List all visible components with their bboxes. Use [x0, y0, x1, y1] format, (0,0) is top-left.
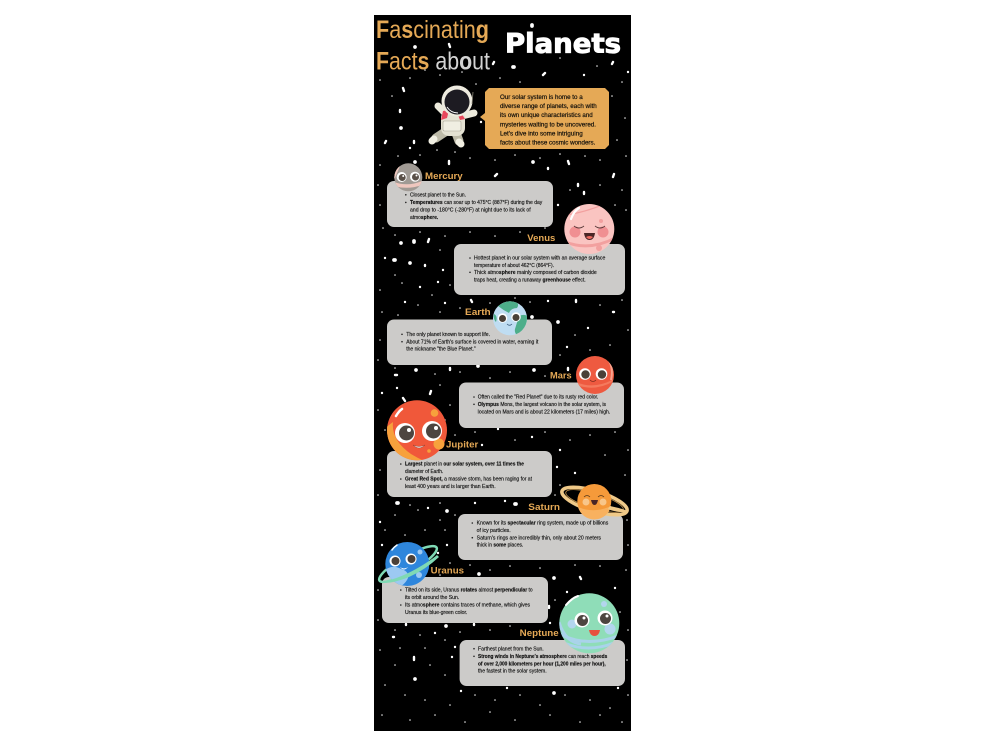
callout: introduction: its own unique characteristics and [500, 113, 593, 119]
Neptune facts: the fastest in the solar system. [478, 669, 547, 675]
panel: Jupiter [385, 400, 552, 497]
panel: Uranus [375, 541, 548, 623]
Uranus facts [400, 588, 533, 616]
Jupiter facts: Largest planet in our solar system, over 11 times the [405, 462, 524, 468]
Venus facts [469, 256, 606, 284]
Jupiter text box [387, 451, 552, 497]
Saturn heading: Saturn [528, 502, 560, 513]
Earth facts: the nickname "the Blue Planet." [406, 347, 476, 353]
callout: introduction: facts about these cosmic wonders. [500, 140, 596, 146]
Jupiter facts: Great Red Spot, a massive storm, has been raging for at [405, 477, 533, 483]
panel: Venus [454, 200, 625, 295]
Neptune facts: Farthest planet from the Sun. [478, 646, 544, 652]
Earth facts: About 71% of Earth's surface is covered in water, earning it [406, 339, 539, 345]
Uranus facts: its orbit around the Sun. [405, 595, 459, 601]
panel: Earth [387, 301, 552, 365]
panel: Mercury [387, 163, 553, 227]
Mars heading: Mars [550, 370, 572, 381]
Uranus heading: Uranus [431, 566, 464, 577]
panel: Mars [459, 356, 624, 428]
Jupiter facts [400, 462, 533, 490]
Earth facts: The only planet known to support life. [406, 332, 490, 338]
Uranus facts: Its atmosphere contains traces of methane, which gives [405, 603, 531, 609]
Earth heading: Earth [465, 307, 491, 318]
Neptune heading: Neptune [520, 628, 559, 639]
callout: introduction: Our solar system is home to a [500, 95, 583, 101]
Jupiter facts: diameter of Earth. [405, 469, 443, 475]
heading line: Facts about: Facts about [376, 48, 490, 76]
heading line: Fascinating: Fascinating [376, 16, 489, 44]
panel: Neptune [460, 593, 625, 686]
Venus facts: temperature of about 462°C (864°F). [474, 263, 554, 269]
Venus facts: traps heat, creating a runaway greenhouse effect. [474, 278, 586, 284]
Neptune text box [460, 640, 625, 686]
Mercury text box [387, 181, 553, 227]
Mars facts: Often called the "Red Planet" due to its rusty red color. [478, 395, 598, 401]
Venus heading: Venus [527, 233, 555, 244]
Neptune facts [473, 646, 608, 675]
Venus facts: Thick atmosphere mainly composed of carbon dioxide [474, 270, 597, 276]
Jupiter heading: Jupiter [446, 439, 479, 450]
Mars facts: Olympus Mons, the largest volcano in the solar system, is [478, 402, 606, 408]
Earth text box [387, 320, 552, 365]
Mars facts: located on Mars and is about 22 kilometers (17 miles) high. [478, 409, 610, 415]
background panel [374, 15, 631, 731]
Saturn facts: Saturn's rings are incredibly thin, only about 20 meters [477, 535, 602, 541]
icon: Mercury planet [394, 163, 422, 191]
Mercury facts: Closest planet to the Sun. [410, 192, 466, 198]
callout: introduction: Let's dive into some intriguing [500, 131, 583, 137]
icon: Jupiter planet [385, 400, 447, 465]
icon: Neptune planet [559, 593, 619, 653]
Uranus facts: Tilted on its side, Uranus rotates almost perpendicular to [405, 588, 533, 594]
panel: Saturn [458, 481, 630, 560]
callout: introduction: mysteries waiting to be uncovered. [500, 122, 596, 128]
Jupiter facts: least 400 years and is larger than Earth. [405, 484, 496, 490]
Neptune facts: Strong winds in Neptune's atmosphere can reach speeds [478, 654, 608, 660]
Uranus facts: Uranus its blue-green color. [405, 610, 467, 616]
Mercury facts: atmosphere. [410, 215, 439, 221]
Venus facts: Hottest planet in our solar system with an average surface [474, 256, 606, 262]
Saturn facts: of icy particles. [477, 528, 511, 534]
icon: Uranus planet [378, 542, 439, 586]
icon: Saturn planet [559, 481, 630, 521]
Mercury facts: Temperatures can soar up to 475°C (887°F) during the day [410, 200, 543, 206]
Earth facts [401, 332, 539, 353]
Mercury facts: and drop to -180°C (-280°F) at night due to its lack of [410, 208, 531, 214]
Neptune facts: of over 2,000 kilometers per hour (1,200 miles per hour), [478, 662, 606, 668]
Mars text box [459, 382, 624, 428]
title [376, 16, 621, 76]
icon: Venus planet [564, 200, 614, 254]
icon: astronaut [432, 86, 474, 144]
Mars facts [473, 395, 610, 415]
callout: introduction: diverse range of planets, each with [500, 104, 597, 110]
Mercury facts [405, 192, 543, 221]
heading word: Planets: Planets [505, 28, 621, 60]
Saturn text box [458, 514, 623, 560]
Uranus text box [382, 577, 548, 623]
Saturn facts: Known for its spectacular ring system, made up of billions [477, 521, 609, 527]
Venus text box [454, 244, 625, 295]
icon: Mars planet [576, 356, 614, 394]
icon: Earth planet [493, 301, 529, 336]
Saturn facts: thick in some places. [477, 543, 523, 549]
Mercury heading: Mercury [425, 171, 463, 182]
callout: introduction [480, 88, 609, 149]
star field [378, 25, 628, 722]
Saturn facts [472, 521, 609, 549]
